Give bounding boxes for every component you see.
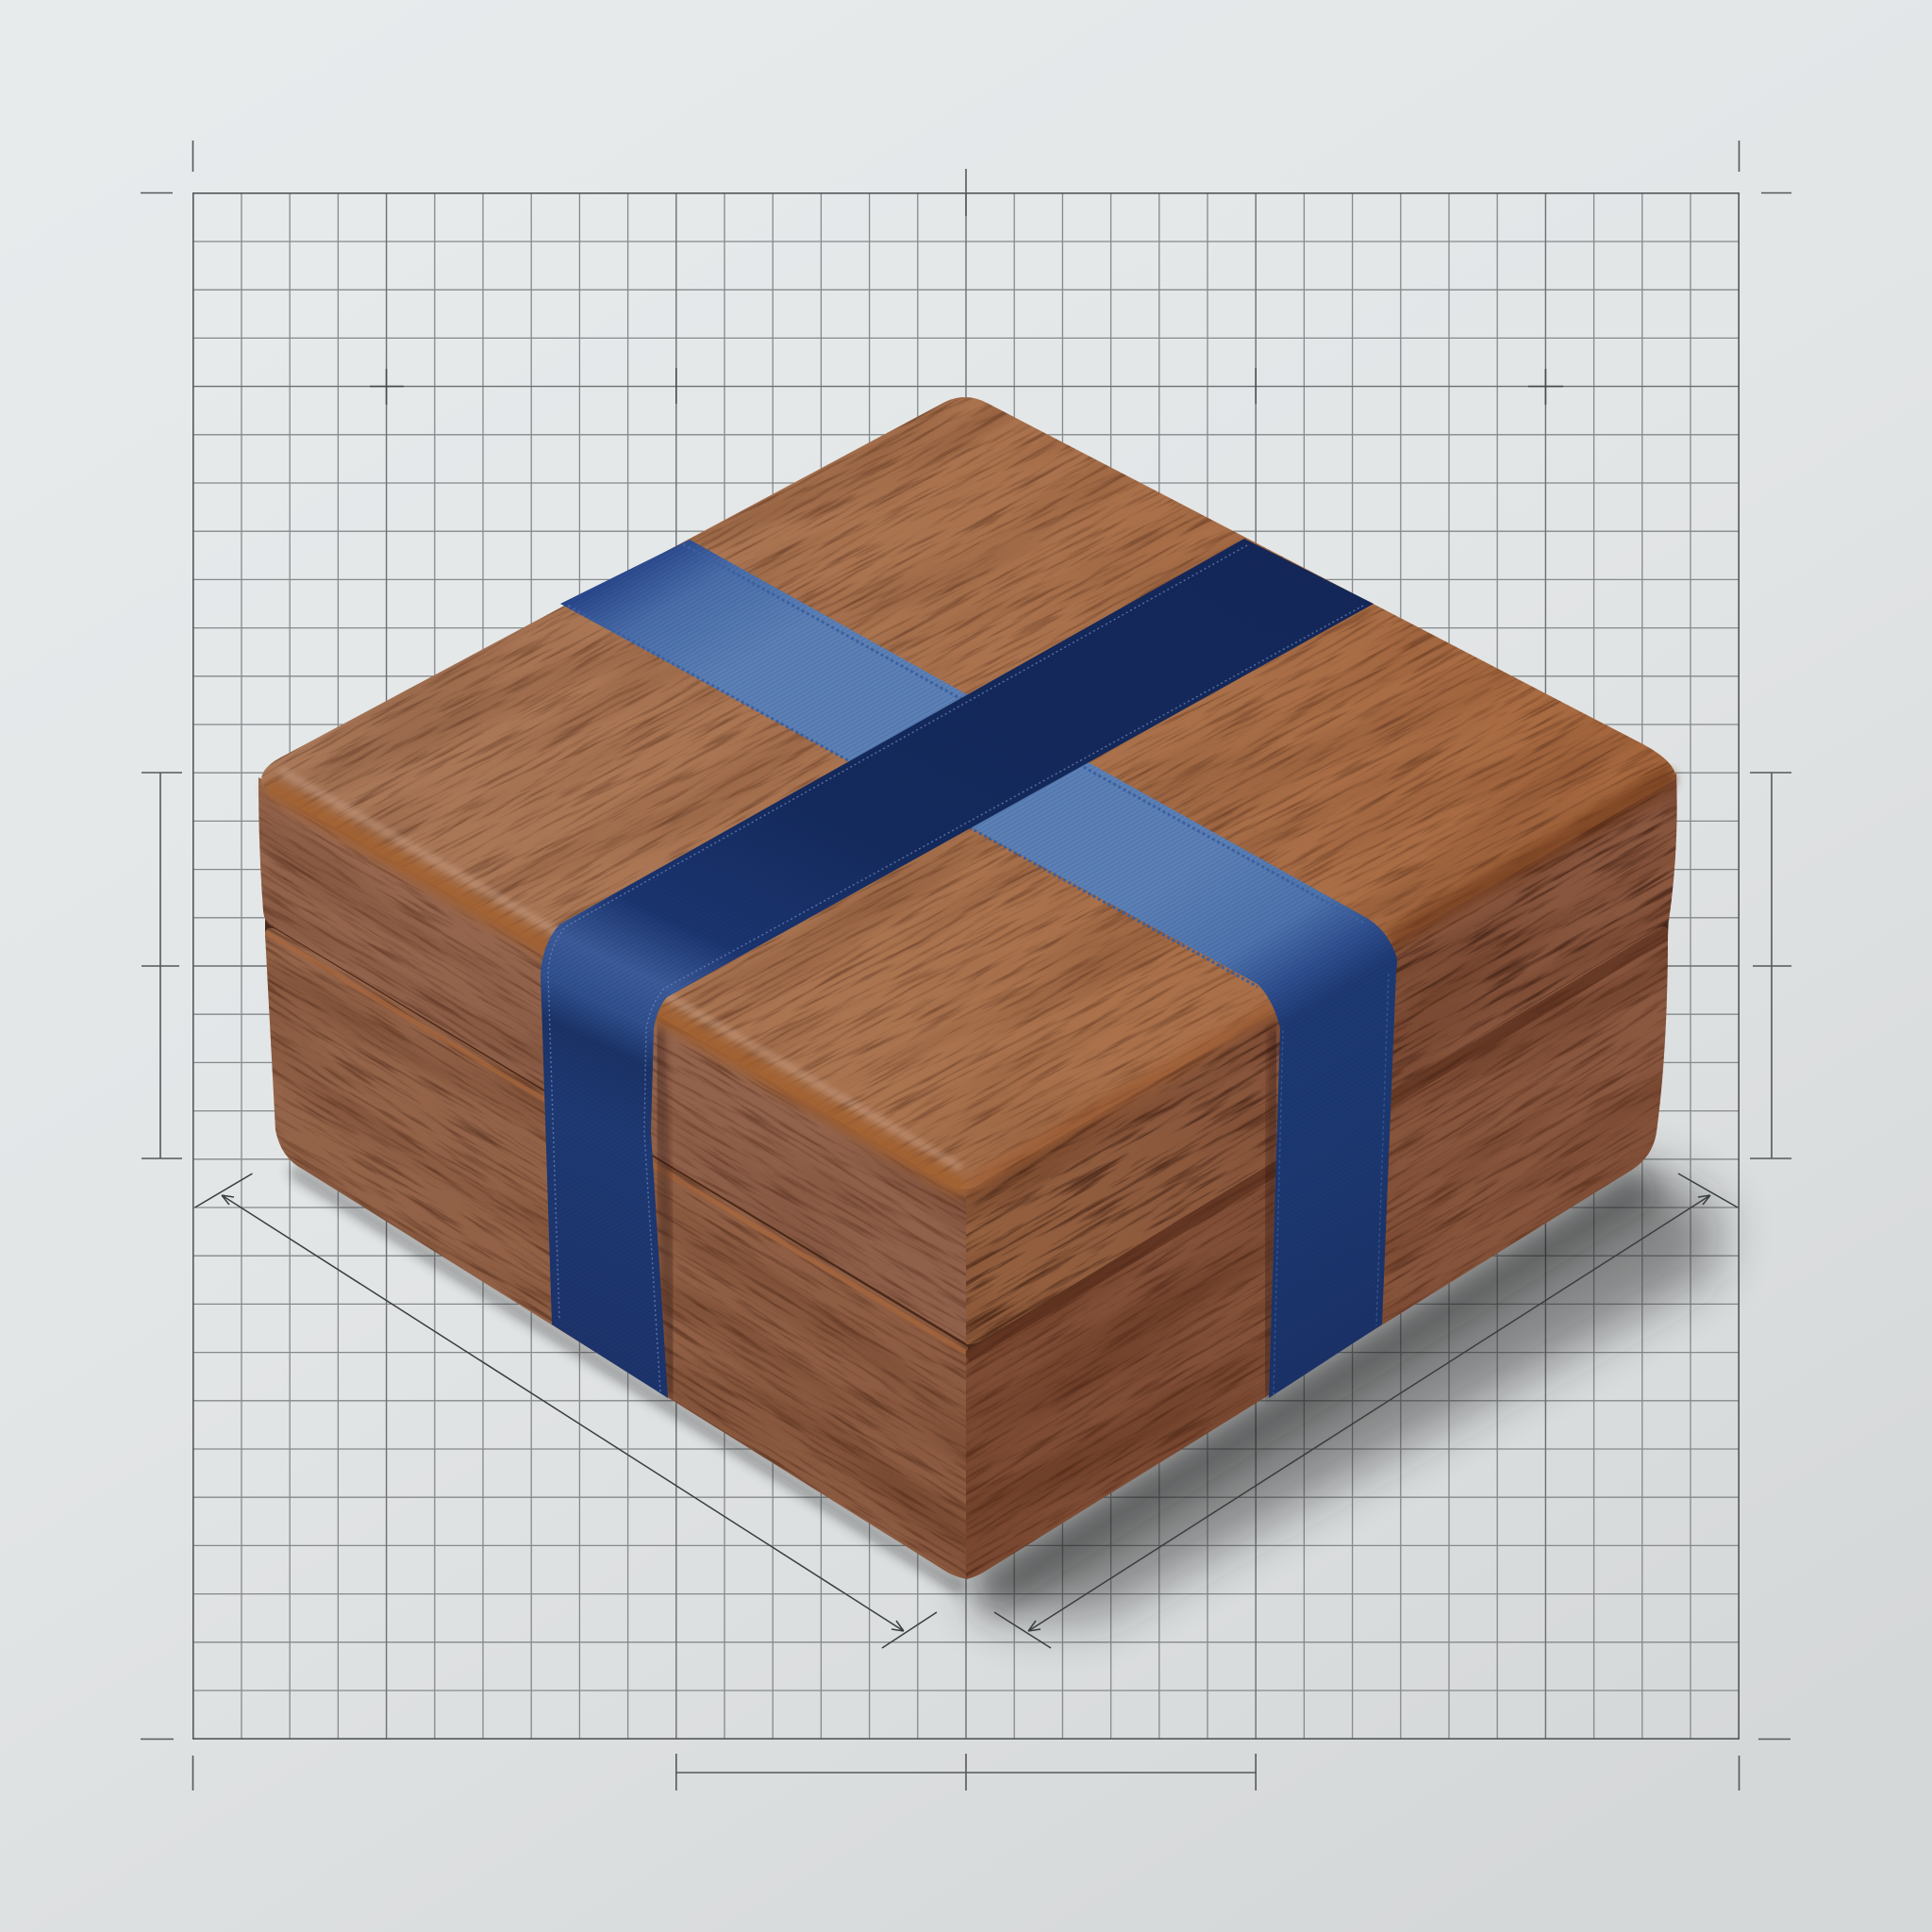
ribbon shadows on the wood [658,1028,1275,1396]
lid left face [258,777,966,1343]
gap between lid and base [265,915,1669,1360]
cast shadow [292,1165,1722,1618]
dimension: depth lower right [994,1174,1738,1648]
dark band top surface [541,539,1374,1028]
grid [193,193,1739,1739]
dimension: overall width bottom [676,1754,1256,1790]
light band top surface [560,540,1396,1028]
ribbon: dark navy band [541,539,1374,1398]
crop marks and alignment crosshairs [141,141,1791,1790]
dimension: height left [142,773,182,1158]
lid top face [261,397,1675,1189]
dimension: height right [1750,773,1791,1158]
lid edge bevels [274,772,1666,1579]
lid right face [966,774,1677,1345]
ribbon: light blue band [560,540,1397,1398]
dark band drop down front left face [541,974,668,1398]
dimension: depth lower left [195,1174,937,1648]
box base left face [265,928,968,1579]
box base right face [966,926,1668,1579]
wooden box [257,397,1683,1579]
light band drop down front right face [1269,956,1397,1398]
